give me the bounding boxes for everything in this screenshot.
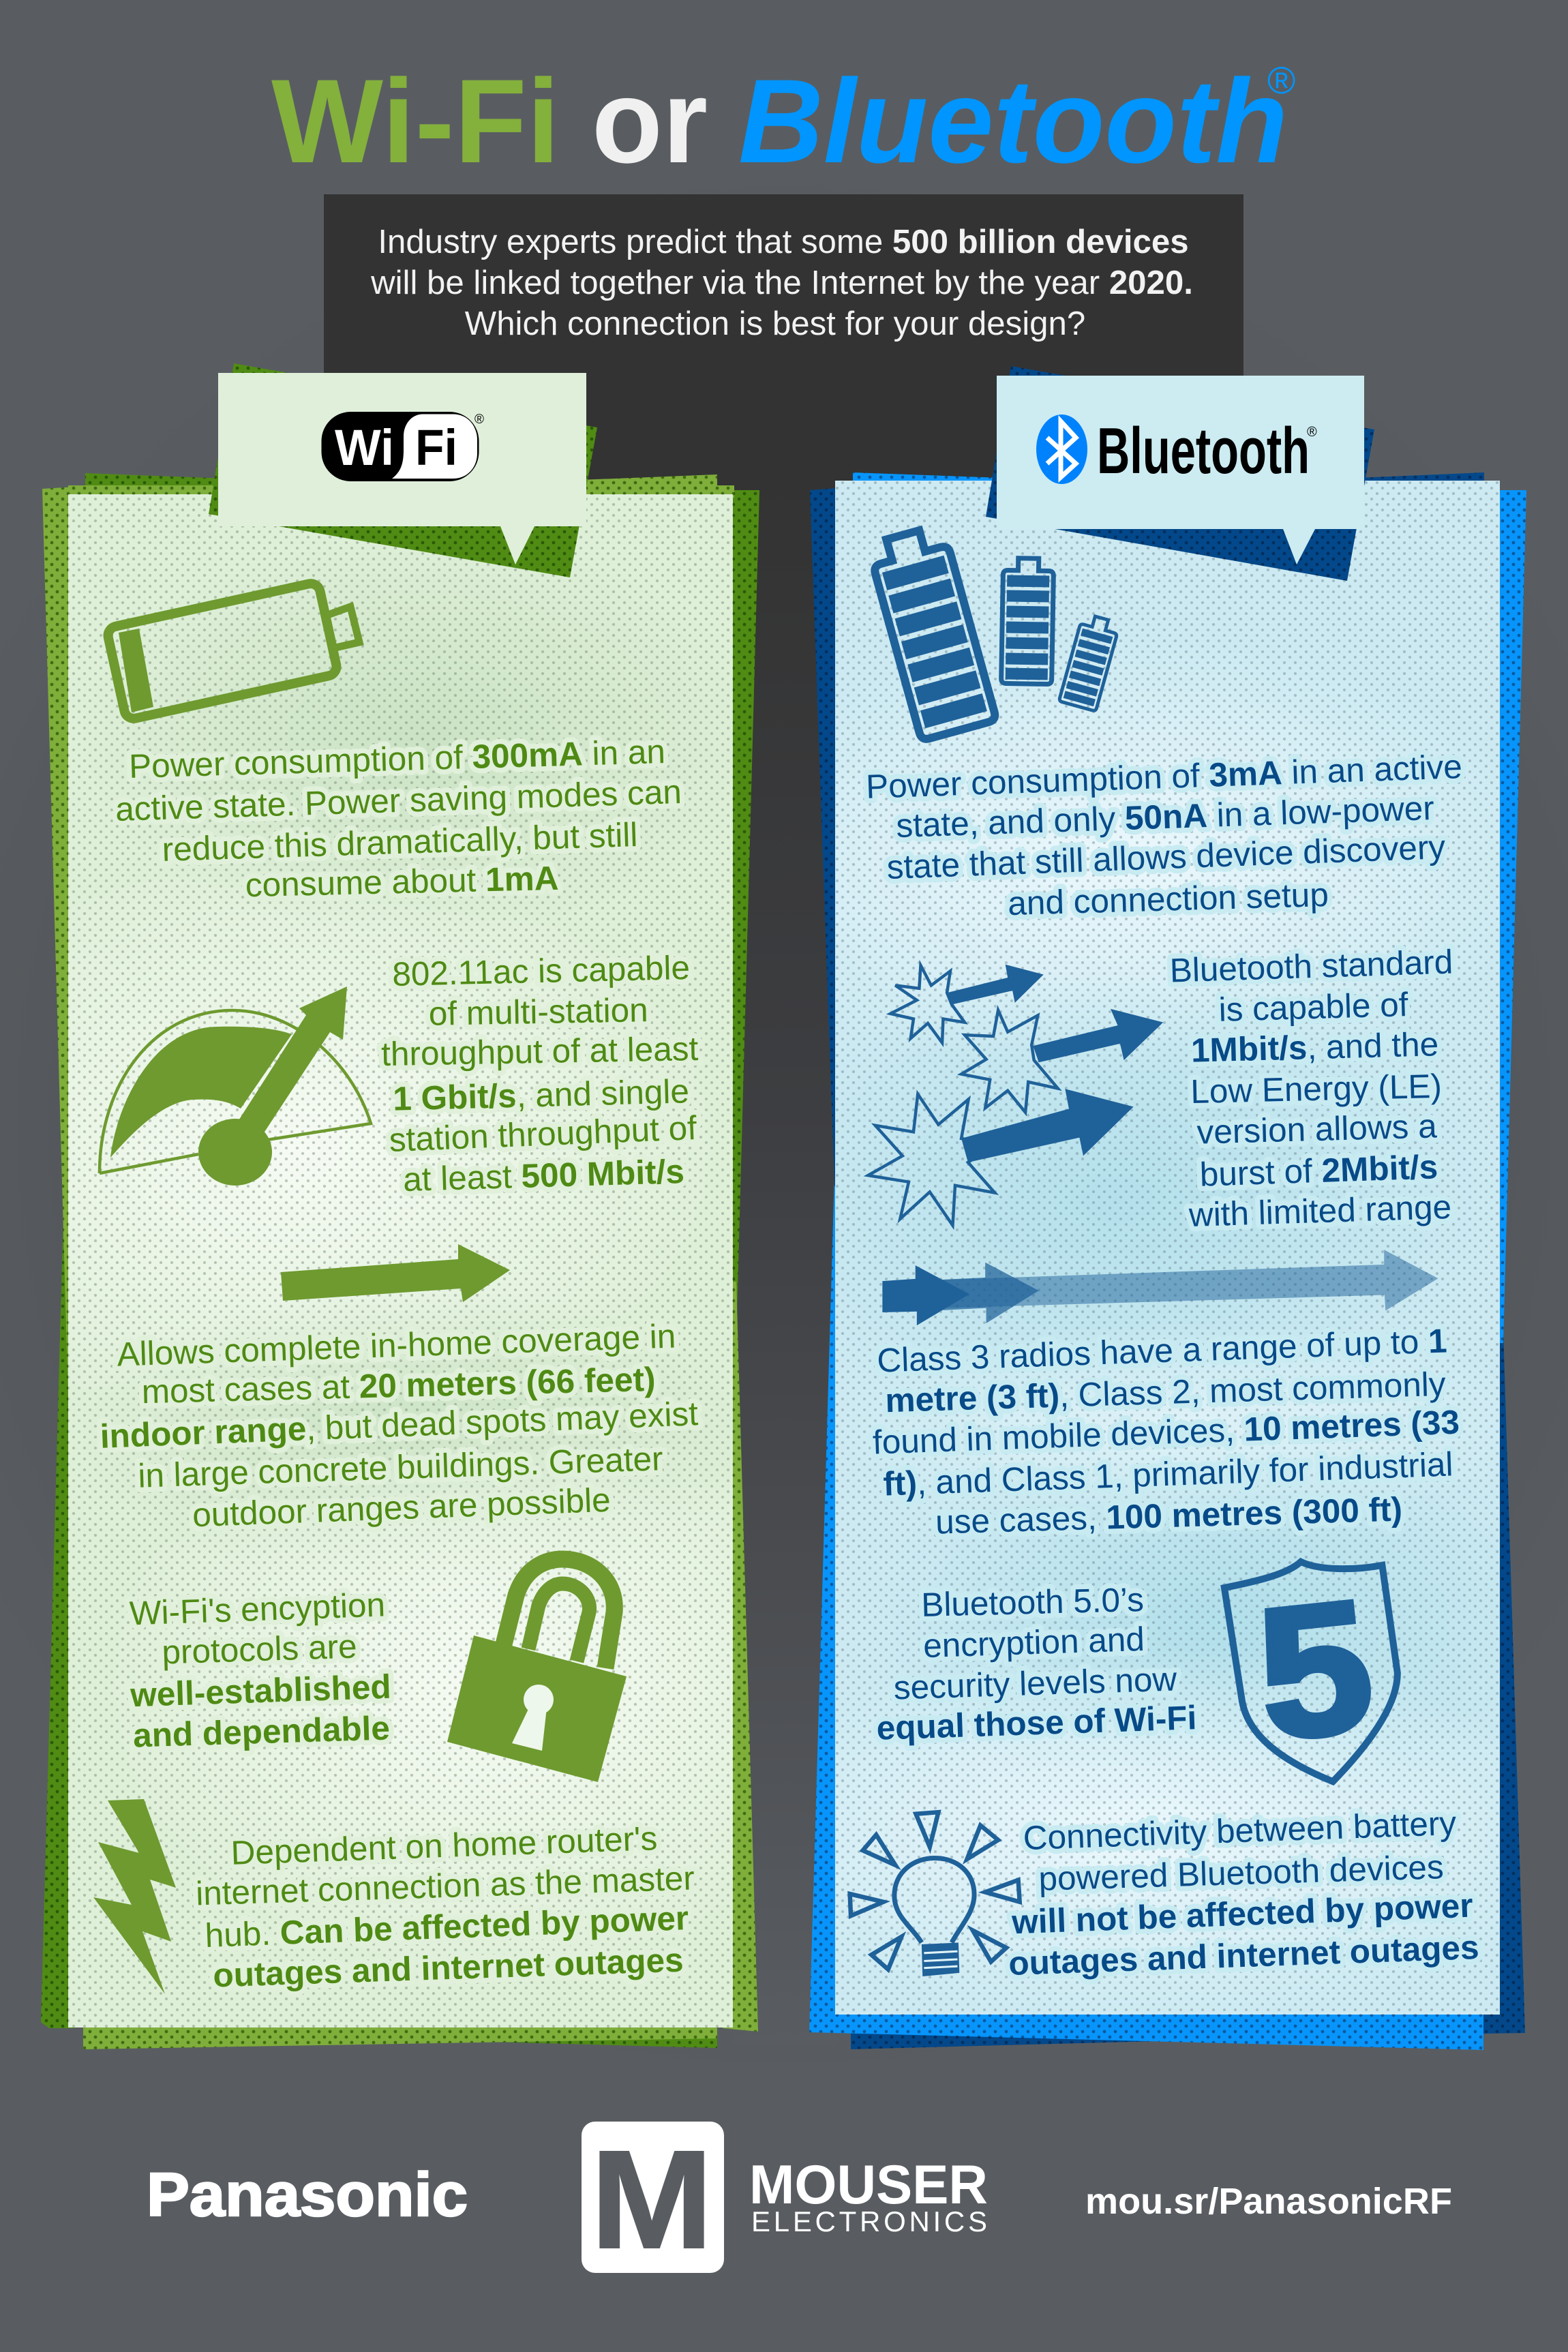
- text: Wi-Fi power consumption: reduce this dramatically, but still: [162, 816, 638, 869]
- text: Wi-Fi range: [100, 1317, 699, 1534]
- text: Wi-Fi security: Wi-Fi's encyption: [129, 1586, 386, 1633]
- tab: Bluetooth: [997, 376, 1364, 564]
- text: Bluetooth connectivity: Connectivity between battery: [1023, 1805, 1457, 1857]
- text: Bluetooth power consumption: and connection setup: [1008, 876, 1329, 922]
- tab backing: Bluetooth: [986, 366, 1374, 581]
- text: Wi-Fi security: protocols are: [162, 1628, 357, 1671]
- text: Bluetooth connectivity: outages and internet outages: [1008, 1929, 1479, 1982]
- icon: lightning bolt: [93, 1799, 176, 1994]
- text: Bluetooth speed: [1169, 943, 1453, 1234]
- icon: padlock: [447, 1559, 627, 1782]
- text: Bluetooth connectivity: will not be affected by power: [1010, 1887, 1473, 1941]
- logo: Wi-Fi: [322, 412, 484, 481]
- panel: Bluetooth: [809, 366, 1526, 2050]
- logo: Wi-Fi: Wi: [335, 419, 394, 476]
- intro box: Which connection is best for your design?: [465, 305, 1085, 342]
- tab: Wi-Fi: [218, 373, 586, 564]
- text: Wi-Fi throughput: 1 Gbit/s, and single: [393, 1072, 690, 1118]
- text: Wi-Fi throughput: at least 500 Mbit/s: [402, 1153, 685, 1198]
- text: Bluetooth security: equal those of Wi-Fi: [876, 1699, 1197, 1747]
- text: Bluetooth range: found in mobile devices, 10 metres (33: [872, 1404, 1460, 1462]
- text: Bluetooth security: Bluetooth 5.0’s: [921, 1581, 1145, 1624]
- link: mou.sr/PanasonicRF: [1085, 2181, 1452, 2222]
- text: Bluetooth security: [876, 1581, 1197, 1747]
- panel: Wi-Fi: [41, 363, 759, 2049]
- text: Bluetooth power consumption: state that still allows device discovery: [886, 828, 1446, 886]
- text: Wi-Fi power consumption: consume about 1mA: [245, 860, 559, 904]
- icon: starbursts with arrows: [868, 965, 1163, 1225]
- logo: Mouser M: M: [590, 2122, 713, 2278]
- panel: Bluetooth paper layers: [809, 472, 1526, 2050]
- icon: speedometer: [100, 986, 371, 1186]
- logo: Bluetooth: [1036, 414, 1317, 487]
- icon: batteries: [867, 524, 1120, 740]
- text: Wi-Fi throughput: of multi-station: [428, 991, 648, 1033]
- intro box: will be linked together via the Internet by the year 2020.: [370, 264, 1193, 301]
- text: Bluetooth power consumption: Power consumption of 3mA in an active: [865, 748, 1463, 806]
- text: Bluetooth speed: Bluetooth standard: [1169, 943, 1453, 990]
- panel: Wi-Fi paper layers: [41, 473, 759, 2049]
- icon: range arrow: [281, 1244, 510, 1302]
- text: Wi-Fi power consumption: Power consumption of 300mA in an: [128, 733, 666, 785]
- text: Wi-Fi dependency: hub. Can be affected by power: [205, 1899, 689, 1955]
- title: Bluetooth: [738, 55, 1288, 188]
- text: Bluetooth range: [872, 1322, 1460, 1541]
- text: Wi-Fi range: indoor range, but dead spots may exist: [100, 1395, 699, 1456]
- icon: range arrows: [882, 1250, 1438, 1325]
- text: Bluetooth speed: Low Energy (LE): [1190, 1068, 1443, 1111]
- text: Wi-Fi range: outdoor ranges are possible: [192, 1481, 612, 1534]
- panel: Bluetooth paper: [835, 481, 1500, 2015]
- text: Bluetooth range: ft), and Class 1, primarily for industrial: [883, 1445, 1453, 1503]
- text: Bluetooth power consumption: [865, 748, 1463, 922]
- icon: light bulb: [850, 1812, 1020, 1976]
- text: Wi-Fi throughput: [381, 949, 699, 1198]
- text: Wi-Fi power consumption: [115, 733, 682, 904]
- title: ®: [1267, 59, 1295, 102]
- logo: Bluetooth: ®: [1307, 425, 1317, 440]
- text: Wi-Fi throughput: 802.11ac is capable: [392, 949, 691, 993]
- logo: Wi-Fi: ®: [474, 412, 484, 427]
- logo: Mouser wordmark: MOUSER: [749, 2154, 988, 2216]
- text: Bluetooth power consumption: state, and only 50nA in a low-power: [896, 789, 1435, 845]
- title: [271, 55, 1295, 188]
- text: Wi-Fi power consumption: active state. Power saving modes can: [115, 773, 682, 828]
- text: Wi-Fi dependency: [195, 1820, 695, 1994]
- text: Bluetooth speed: is capable of: [1218, 986, 1408, 1029]
- text: Bluetooth range: Class 3 radios have a range of up to 1: [876, 1322, 1447, 1380]
- intro box: Industry experts predict that some 500 billion devices: [378, 223, 1189, 260]
- text: Bluetooth range: use cases, 100 metres (300 ft): [935, 1490, 1403, 1541]
- logo: Mouser wordmark: ELECTRONICS: [751, 2205, 987, 2237]
- tab backing: Wi-Fi: [209, 363, 597, 577]
- panel: Wi-Fi paper: [68, 494, 733, 2027]
- text: Bluetooth speed: with limited range: [1188, 1188, 1452, 1234]
- text: Bluetooth range: metre (3 ft), Class 2, most commonly: [885, 1366, 1447, 1419]
- text: Wi-Fi range: most cases at 20 meters (66 feet): [141, 1361, 656, 1411]
- text: Wi-Fi range: Allows complete in-home coverage in: [117, 1317, 676, 1374]
- text: Wi-Fi dependency: internet connection as the master: [195, 1860, 695, 1912]
- logo: Bluetooth: Bluetooth: [1097, 414, 1310, 487]
- text: Wi-Fi security: and dependable: [132, 1709, 391, 1755]
- text: Bluetooth speed: burst of 2Mbit/s: [1199, 1148, 1438, 1194]
- text: Wi-Fi security: well-established: [129, 1668, 391, 1714]
- text: Wi-Fi dependency: outages and internet outages: [213, 1942, 684, 1994]
- text: Wi-Fi throughput: throughput of at least: [381, 1030, 699, 1073]
- logo: Wi-Fi: Fi: [415, 419, 457, 476]
- text: Bluetooth speed: version allows a: [1196, 1107, 1438, 1151]
- text: Bluetooth connectivity: powered Bluetooth devices: [1038, 1848, 1444, 1898]
- text: Bluetooth security: security levels now: [893, 1660, 1177, 1707]
- text: Bluetooth security: encryption and: [922, 1620, 1145, 1665]
- text: Bluetooth speed: 1Mbit/s, and the: [1190, 1025, 1439, 1070]
- intro box: [324, 194, 1243, 487]
- icon: low battery: [106, 582, 359, 721]
- text: Wi-Fi throughput: station throughput of: [389, 1109, 697, 1159]
- title: or: [592, 55, 708, 188]
- icon: shield with 5: 5: [1249, 1561, 1381, 1779]
- title: Wi-Fi: [271, 55, 560, 188]
- text: Wi-Fi security: [129, 1586, 391, 1755]
- text: Wi-Fi dependency: Dependent on home router's: [230, 1820, 658, 1872]
- text: Bluetooth connectivity: [1008, 1805, 1479, 1982]
- logo: Panasonic: Panasonic: [147, 2161, 468, 2229]
- text: Wi-Fi range: in large concrete buildings. Greater: [138, 1440, 663, 1495]
